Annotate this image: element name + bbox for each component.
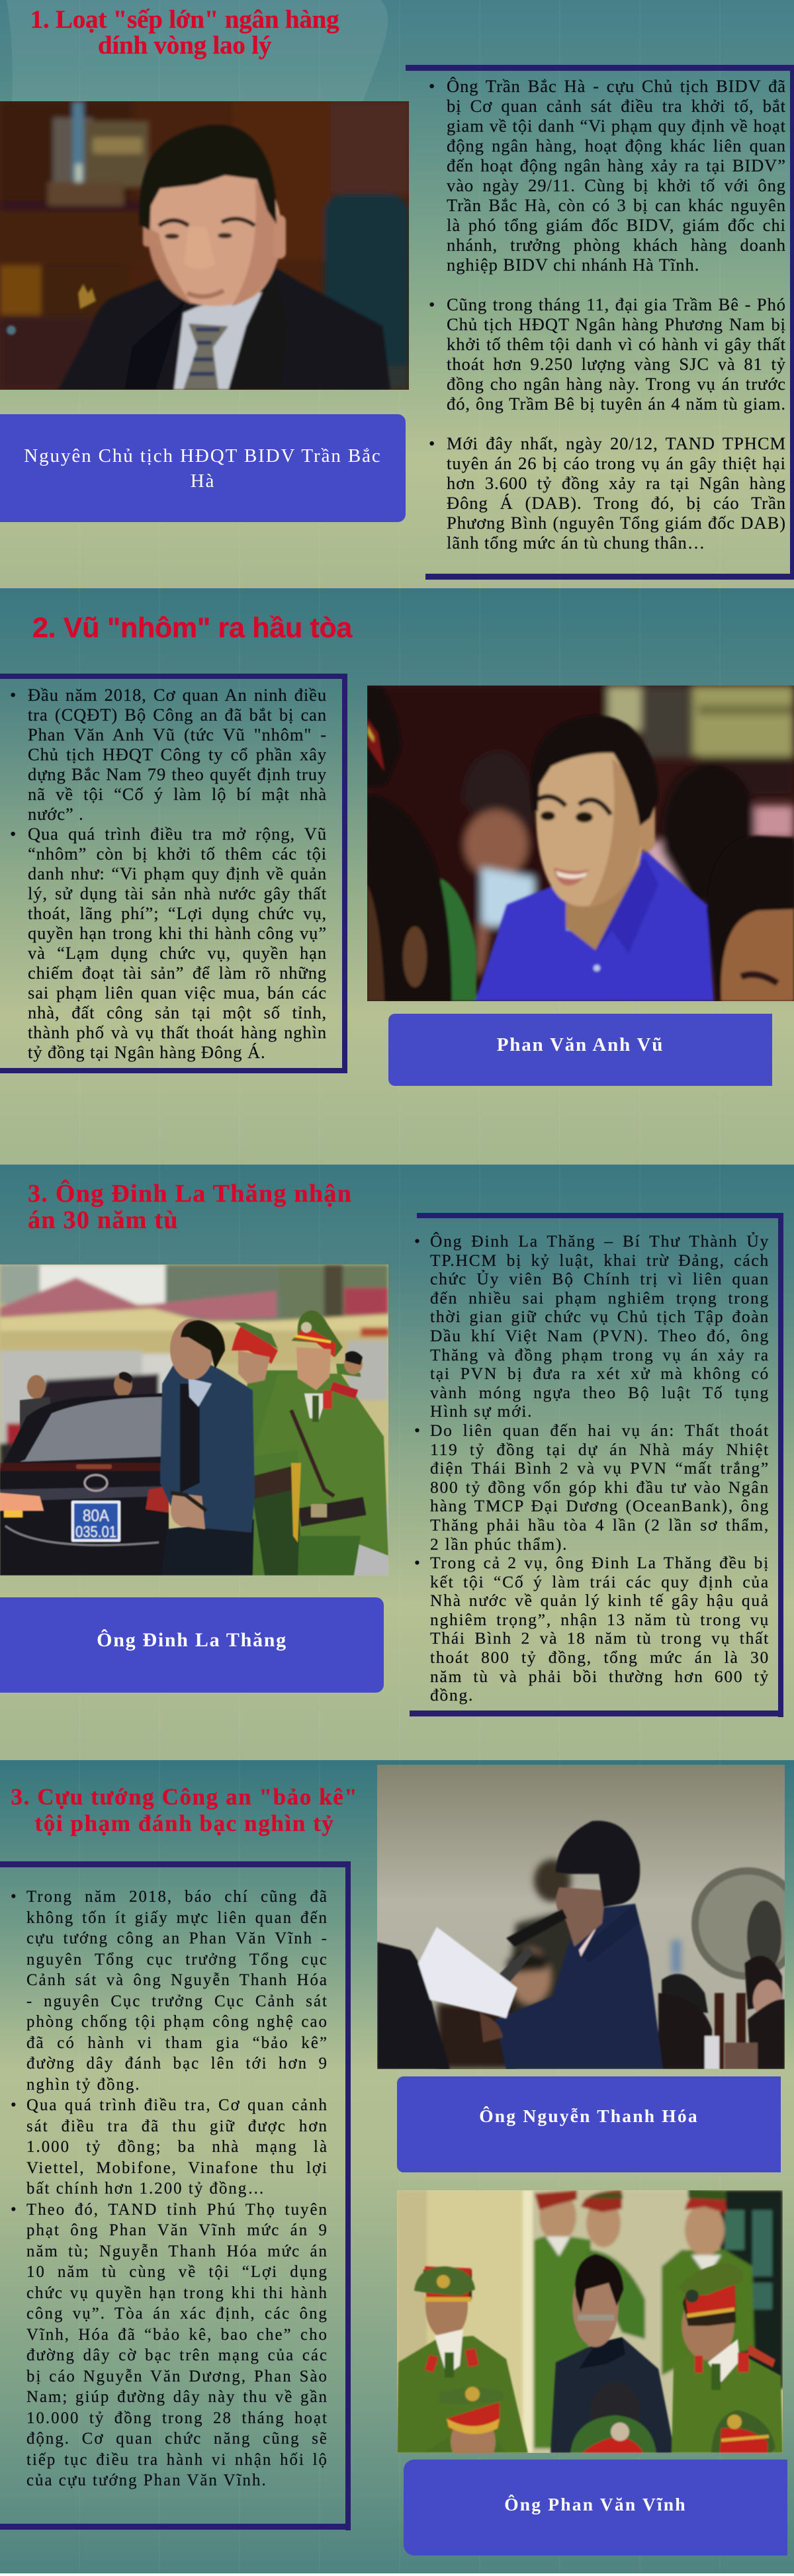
photo: Đinh La Thăng: 035.01 — [75, 1523, 116, 1541]
section 4 heading: 3. Cựu tướng Công an "bảo kê" — [11, 1784, 358, 1810]
panel: section 3 text: kết tội “Cố ý làm trái các quy định của — [430, 1572, 770, 1591]
section 1 heading: dính vòng lao lý — [98, 31, 271, 60]
caption: Phan Văn Anh Vũ: Phan Văn Anh Vũ — [497, 1034, 664, 1055]
caption: Trần Bắc Hà: Nguyên Chủ tịch HĐQT BIDV Trần Bắc — [24, 445, 382, 466]
panel: section 3 text: Do liên quan đến hai vụ án: Thất thoát — [430, 1421, 770, 1440]
panel: section 1 text: là phó tổng giám đốc BIDV, giám đốc chi — [447, 215, 786, 235]
panel: section 1 text: đồng cho ngân hàng này. Trong vụ án trước — [447, 374, 786, 394]
panel: section 2 text: sai phạm liên quan việc mua, bán các — [28, 983, 327, 1002]
panel: section 4 text: Vĩnh, Hóa đã “bảo kê, bao che” cho — [26, 2325, 328, 2344]
panel: section 3 text: đồng. — [430, 1685, 474, 1705]
caption: Đinh La Thăng — [0, 1597, 384, 1693]
panel: section 4 text: 10 năm tù cùng về tội “Lợi dụng — [26, 2263, 328, 2281]
panel: section 4 text: • — [11, 1888, 18, 1906]
panel: section 1 text: tuyên án 26 bị cáo trong vụ án gây thiệt hại — [447, 453, 786, 473]
panel: section 1 text: • — [429, 76, 435, 96]
panel: section 2 text: tra (CQĐT) Bộ Công an đã bắt bị can — [28, 705, 327, 725]
panel: section 3 text: nghiêm trọng”, nhận 13 năm tù trong vụ — [430, 1610, 770, 1629]
panel: section 4 text: Viettel, Mobifone, Vinafone thu lợi — [26, 2158, 328, 2177]
photo: Phan Văn Vĩnh — [397, 2190, 783, 2453]
panel: section 3 text: 119 tỷ đồng tại dự án Nhà máy Nhiệt — [430, 1440, 770, 1459]
panel: section 2 text: tỷ đồng tại Ngân hàng Đông Á. — [28, 1042, 266, 1062]
panel: section 4 text: chức vụ quyền hạn trong khi thi hành — [26, 2284, 328, 2301]
panel: section 4 text: sát điều tra đã thu giữ được hơn — [26, 2117, 328, 2135]
panel: section 1 text: hơn 3.600 tỷ đồng xảy ra tại Ngân hàng — [447, 473, 786, 493]
panel: section 3 text: năm tù và phải bồi thường hơn 600 tỷ — [430, 1667, 770, 1686]
panel: section 4 text: không tốn ít giấy mực liên quan đến — [26, 1908, 328, 1927]
panel: section 2 text: Đầu năm 2018, Cơ quan An ninh điều — [28, 685, 327, 705]
panel: section 1 text: Ông Trần Bắc Hà - cựu Chủ tịch BIDV đã — [447, 76, 786, 96]
panel: section 4 text: đường dây đánh bạc lên tới hơn 9 — [26, 2055, 328, 2072]
panel: section 3 text: • — [414, 1421, 421, 1440]
panel: section 4 text: cựu tướng công an Phan Văn Vĩnh - — [26, 1930, 328, 1947]
panel: section 3 text: Thái Bình 2 và 18 năm tù trong vụ thất — [430, 1628, 770, 1648]
panel: section 4 text: Qua quá trình điều tra, Cơ quan cảnh — [26, 2096, 328, 2114]
photo: Đinh La Thăng — [0, 1265, 388, 1576]
panel: section 1 text: • — [429, 433, 435, 453]
photo: Nguyễn Thanh Hóa — [377, 1765, 785, 2069]
panel: section 4 text: đường dây cờ bạc trên mạng của các — [26, 2346, 328, 2364]
panel: section 4 text: đã có hành vi tham gia “bảo kê” — [26, 2034, 328, 2051]
panel: section 2 text: nã về tội “Cố ý làm lộ bí mật nhà — [28, 784, 327, 804]
panel: section 1 text — [406, 65, 794, 580]
caption: Nguyễn Thanh Hóa — [397, 2076, 781, 2172]
panel: section 3 text — [410, 1213, 783, 1717]
section 4 heading: tội phạm đánh bạc nghìn tỷ — [34, 1810, 335, 1836]
panel: section 4 text — [0, 1861, 351, 2530]
panel: section 4 text: phạt ông Phan Văn Vĩnh mức án 9 — [26, 2221, 328, 2239]
panel: section 4 text: phòng chống tội phạm công nghệ cao — [26, 2013, 328, 2031]
panel: section 1 text: Phương Bình (nguyên Tổng giám đốc DAB) — [447, 513, 786, 533]
section 4 heading — [11, 1784, 358, 1836]
caption: Nguyễn Thanh Hóa: Ông Nguyễn Thanh Hóa — [479, 2106, 699, 2126]
panel: section 4 text: tiếp tục điều tra hành vi nhận hối lộ — [26, 2451, 328, 2468]
panel: section 3 text: thời gian giữ chức vụ Chủ tịch Tập đoàn — [430, 1307, 770, 1326]
caption: Trần Bắc Hà — [0, 414, 406, 522]
panel: section 3 text: thoát 800 tỷ đồng, tổng mức án là 30 — [430, 1648, 770, 1667]
caption: Phan Văn Vĩnh — [404, 2460, 787, 2555]
section 1 heading — [30, 5, 339, 60]
panel: section 3 text: Dầu khí Việt Nam (PVN). Theo đó, ông — [430, 1326, 770, 1345]
panel: section 4 text: Theo đó, TAND tỉnh Phú Thọ tuyên — [26, 2201, 328, 2218]
panel: section 3 text: Trong cả 2 vụ, ông Đinh La Thăng đều bị — [430, 1553, 770, 1572]
section 3 heading — [28, 1179, 352, 1233]
panel: section 4 text: Cảnh sát và ông Nguyễn Thanh Hóa — [26, 1971, 328, 1989]
panel: section 1 text: khởi tố thêm tội danh vì có hành vi gây thất — [447, 334, 786, 354]
panel: section 4 text: 1.000 tỷ đồng; ba nhà mạng là — [26, 2138, 328, 2156]
panel: section 1 text: Mới đây nhất, ngày 20/12, TAND TPHCM — [447, 433, 786, 453]
panel: section 2 text: danh như: “Vi phạm quy định về quản — [28, 864, 327, 883]
panel: section 1 text: Đông Á (DAB). Trong đó, bị cáo Trần — [447, 493, 786, 513]
panel: section 3 text: vành móng ngựa theo Bộ luật Tố tụng — [430, 1383, 770, 1402]
panel: section 3 text: chức Ủy viên Bộ Chính trị vì liên quan — [430, 1269, 770, 1288]
panel: section 1 text: nhánh, trưởng phòng khách hàng doanh — [447, 235, 786, 255]
panel: section 2 text: thành phố và vụ thất thoát hàng nghìn — [28, 1022, 327, 1042]
panel: section 4 text: bị cáo Nguyễn Văn Dương, Phan Sào — [26, 2368, 328, 2385]
panel: section 1 text: đến hoạt động ngân hàng xảy ra tại BIDV” — [447, 155, 786, 175]
panel: section 3 text: Thăng và đồng phạm trong vụ án xảy ra — [430, 1345, 770, 1364]
panel: section 1 text: động ngân hàng, hoạt động khác liên quan — [447, 136, 786, 155]
panel: section 4 text: của cựu tướng Phan Văn Vĩnh. — [26, 2471, 267, 2489]
panel: section 3 text: TP.HCM bị kỷ luật, khai trừ Đảng, cách — [430, 1251, 770, 1270]
panel: section 2 text: và “Lạm dụng chức vụ, quyền hạn — [28, 943, 327, 963]
panel: section 4 text: Trong năm 2018, báo chí cũng đã — [26, 1888, 328, 1906]
section 2 heading: 2. Vũ "nhôm" ra hầu tòa — [32, 612, 352, 644]
panel: section 4 text: • — [11, 2096, 18, 2114]
panel: section 4 text: - nguyên Cục trưởng Cục Cảnh sát — [26, 1992, 328, 2010]
panel: section 3 text: đến nhiều sai phạm nghiêm trọng trong — [430, 1288, 770, 1308]
panel: section 2 text: dựng Bắc Nam 79 theo quyết định truy — [28, 764, 327, 784]
panel: section 3 text: Ông Đinh La Thăng – Bí Thư Thành Ủy — [430, 1231, 770, 1251]
panel: section 2 text: Phan Văn Anh Vũ (tức Vũ "nhôm" - — [28, 725, 327, 744]
panel: section 3 text: 2 lần phúc thẩm). — [430, 1534, 568, 1554]
panel: section 3 text: Hình sự mới. — [430, 1401, 533, 1421]
panel: section 2 text: Chủ tịch HĐQT Công ty cổ phần xây — [28, 744, 327, 764]
panel: section 2 text: • — [10, 824, 17, 844]
panel: section 3 text: • — [414, 1553, 421, 1572]
panel: section 3 text: hàng TMCP Đại Dương (OceanBank), ông — [430, 1496, 770, 1515]
panel: section 1 text: Chủ tịch HĐQT Ngân hàng Phương Nam bị — [447, 314, 786, 334]
panel: section 3 text: Nhà nước về quản lý kinh tế gây hậu quả — [430, 1591, 770, 1610]
photo: Trần Bắc Hà — [0, 101, 409, 390]
panel: section 2 text: lý, sử dụng tài sản nhà nước gây thất — [28, 883, 327, 903]
panel: section 2 text: “nhôm” còn bị khởi tố thêm các tội — [28, 844, 327, 864]
panel: section 4 text: 10.000 tỷ đồng trong 28 tháng hoạt — [26, 2409, 328, 2427]
panel: section 4 text: Nam; giúp đường dây này thu về gần — [26, 2388, 328, 2406]
panel: section 2 text: Qua quá trình điều tra mở rộng, Vũ — [28, 824, 327, 844]
panel: section 1 text: Trần Bắc Hà, còn có 3 bị can khác nguyên — [447, 195, 786, 215]
panel: section 3 text: Thăng phải hầu tòa 4 lần (2 lần sơ thẩm, — [430, 1515, 770, 1534]
panel: section 1 text: giam về tội danh “Vi phạm quy định về hoạt — [447, 116, 786, 136]
panel: section 4 text: bất chính hơn 1.200 tỷ đồng… — [26, 2180, 265, 2198]
panel: section 1 text: vào ngày 29/11. Cùng bị khởi tố với ông — [447, 175, 786, 195]
panel: section 1 text: thoát hơn 9.250 lượng vàng SJC và 81 tỷ — [447, 354, 786, 374]
caption: Đinh La Thăng: Ông Đinh La Thăng — [97, 1629, 287, 1651]
panel: section 2 text — [0, 674, 347, 1073]
panel: section 2 text: quyền hạn trong khi thi hành công vụ” — [28, 923, 327, 943]
panel: section 2 text: nước” . — [28, 804, 84, 824]
photo: Đinh La Thăng: 80A — [83, 1507, 109, 1525]
panel: section 2 text: • — [10, 685, 17, 705]
section 1 heading: 1. Loạt "sếp lớn" ngân hàng — [30, 5, 339, 34]
section 3 heading: 3. Ông Đinh La Thăng nhận — [28, 1180, 352, 1208]
panel: section 3 text: tại PVN bị đưa ra xét xử mà không có — [430, 1364, 770, 1383]
panel: section 2 text: chiếm đoạt tài sản” để làm rõ những — [28, 963, 327, 983]
photo: Phan Văn Anh Vũ — [367, 686, 794, 1001]
panel: section 3 text: 800 tỷ đồng vốn góp khi đầu tư vào Ngân — [430, 1478, 770, 1497]
section 3 heading: án 30 năm tù — [28, 1206, 179, 1233]
panel: section 4 text: động. Cơ quan chức năng cũng sẽ — [26, 2430, 328, 2448]
panel: section 1 text: nghiệp BIDV chi nhánh Hà Tĩnh. — [447, 255, 699, 275]
panel: section 1 text: lãnh tổng mức án tù chung thân… — [447, 533, 705, 553]
panel: section 4 text: • — [11, 2201, 18, 2218]
panel: section 2 text: thoát, lãng phí”; “Lợi dụng chức vụ, — [28, 903, 327, 923]
panel: section 4 text: công vụ”. Tòa án xác định, các ông — [26, 2305, 328, 2323]
panel: section 1 text: đó, ông Trầm Bê bị tuyên án 4 năm tù giam. — [447, 394, 786, 414]
panel: section 1 text: Cũng trong tháng 11, đại gia Trầm Bê - Phó — [447, 294, 786, 314]
panel: section 3 text: điện Thái Bình 2 và vụ PVN “mất trắng” — [430, 1458, 770, 1478]
panel: section 4 text: nguyên Tổng cục trưởng Tổng cục — [26, 1951, 328, 1968]
panel: section 2 text: nhà, đất công sản tại một số tỉnh, — [28, 1002, 327, 1022]
panel: section 3 text: • — [414, 1231, 421, 1251]
panel: section 4 text: nghìn tỷ đồng. — [26, 2075, 141, 2094]
caption: Trần Bắc Hà: Hà — [191, 470, 215, 492]
panel: section 1 text: • — [429, 294, 435, 314]
panel: section 4 text: năm tù; Nguyễn Thanh Hóa mức án — [26, 2242, 328, 2260]
caption: Phan Văn Vĩnh: Ông Phan Văn Vĩnh — [504, 2494, 687, 2514]
panel: section 1 text: bị Cơ quan cảnh sát điều tra khởi tố, bắt — [447, 96, 786, 116]
caption: Phan Văn Anh Vũ — [388, 1014, 772, 1086]
